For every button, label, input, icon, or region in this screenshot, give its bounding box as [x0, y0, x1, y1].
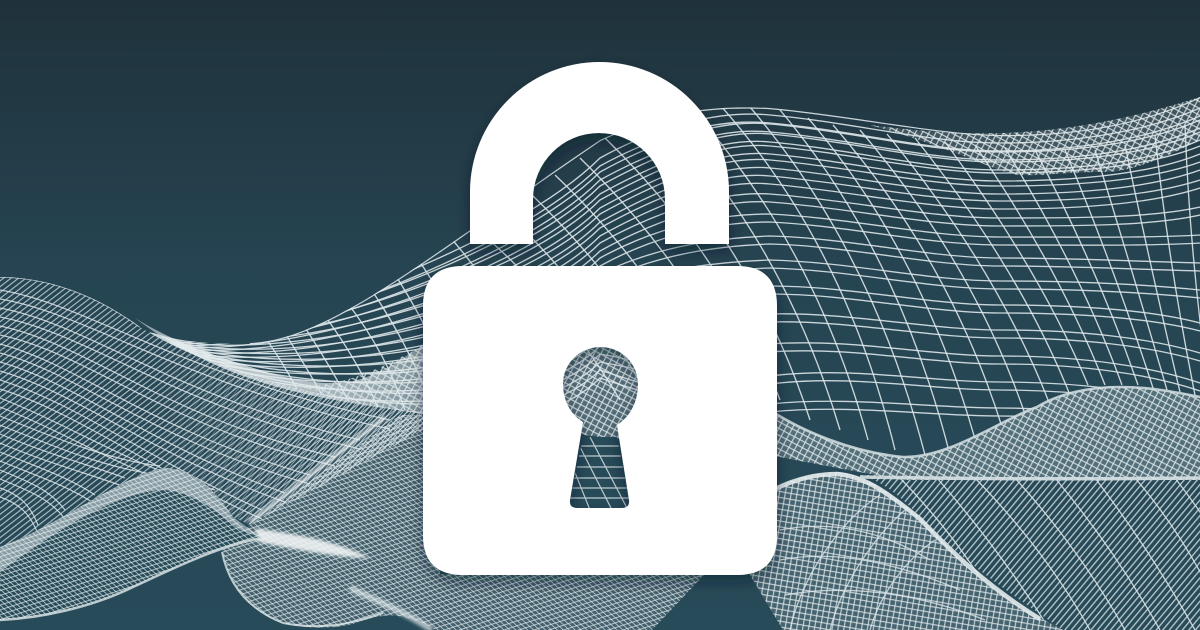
mesh: lower-right hatched sheet: [860, 475, 1200, 630]
mesh along-lines, intermediate set: [150, 116, 1200, 438]
mesh: left fold highlight: [135, 318, 423, 414]
padlock shackle: [470, 62, 729, 244]
padlock body with keyhole: [423, 266, 777, 575]
mesh top edge: [250, 97, 1200, 343]
mesh along-lines: [150, 108, 1200, 430]
mesh: right mid dense band: [770, 387, 1200, 480]
mesh: lower-centre sheet with bright streak: [222, 415, 705, 630]
mesh: large upper wave: [150, 97, 1200, 455]
mesh: lower-left wave: [0, 468, 262, 620]
mesh: lower-right curved grid: [750, 472, 1063, 630]
mesh: left hatched wave: [0, 277, 423, 547]
mesh across-lines: [260, 105, 1200, 455]
padlock: [423, 62, 777, 575]
mesh: upper-right dense fold: [870, 97, 1200, 175]
mesh: visible through keyhole: [563, 347, 638, 508]
